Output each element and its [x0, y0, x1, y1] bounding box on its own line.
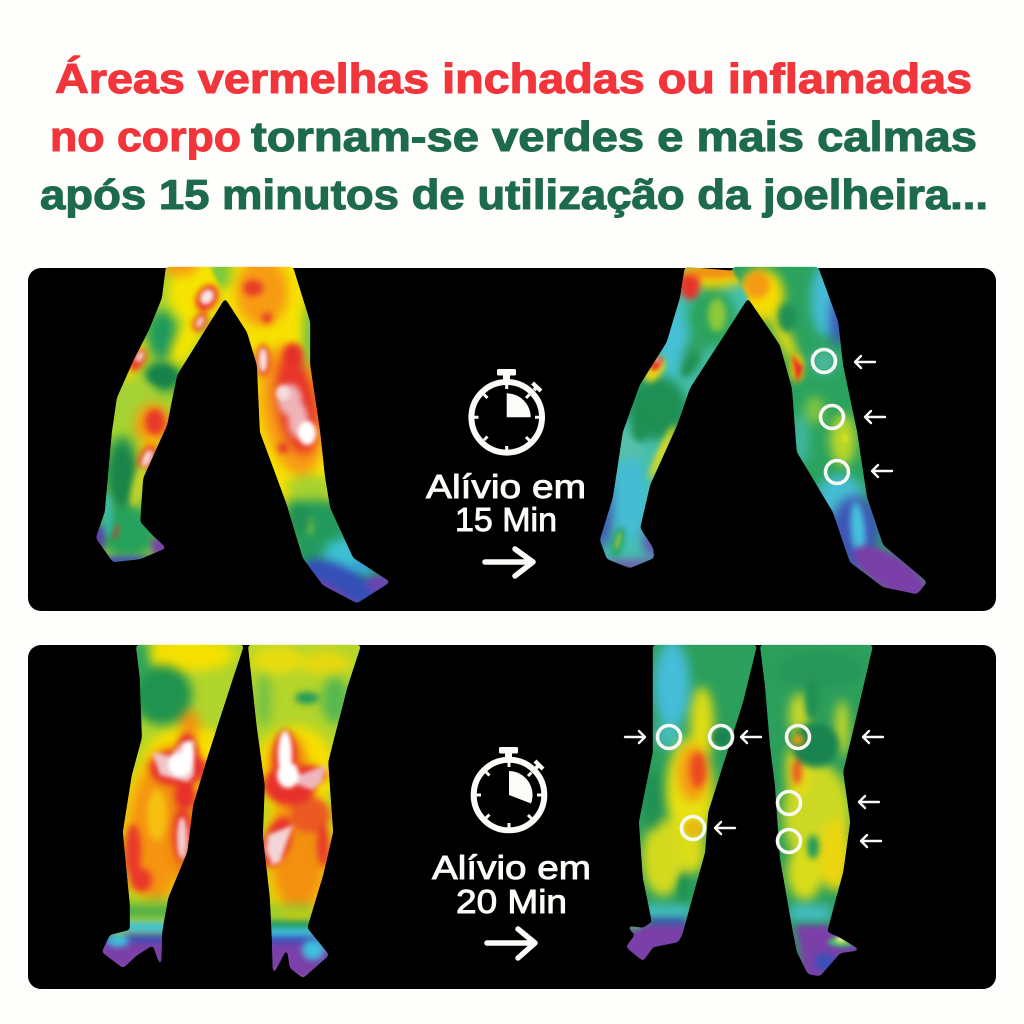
title: [40, 55, 988, 218]
panel: 20 minutes: [28, 638, 996, 989]
label: relief in 20 min: [432, 849, 591, 920]
arrow: 15 min: [485, 549, 533, 576]
markers: circles and arrows, 15 min: [812, 350, 892, 484]
markers: circles and arrows, 20 min: [625, 726, 883, 852]
label: relief in 20 min: Alívio em: [432, 849, 591, 886]
thermal image: legs after 20 min: [620, 641, 873, 980]
title: Áreas vermelhas inchadas ou inflamadas: [55, 55, 972, 102]
thermal image: legs after 15 min: [594, 264, 935, 609]
title: tornam-se verdes e mais calmas: [251, 113, 977, 160]
icon: stopwatch 20 min: [474, 747, 544, 830]
arrow: 20 min: [487, 929, 535, 958]
label: relief in 15 min: 15 Min: [455, 501, 557, 538]
thermal image: legs before, 20 min panel: [100, 638, 361, 979]
label: relief in 20 min: 20 Min: [456, 883, 567, 920]
thermal image: legs before, 15 min panel: [96, 266, 388, 602]
panel: 15 minutes: [28, 254, 996, 621]
title: após 15 minutos de utilização da joelheira...: [40, 171, 988, 218]
icon: stopwatch 15 min: [471, 369, 542, 453]
label: relief in 15 min: Alívio em: [426, 468, 586, 505]
title: no corpo: [50, 113, 241, 160]
label: relief in 15 min: [426, 468, 586, 538]
